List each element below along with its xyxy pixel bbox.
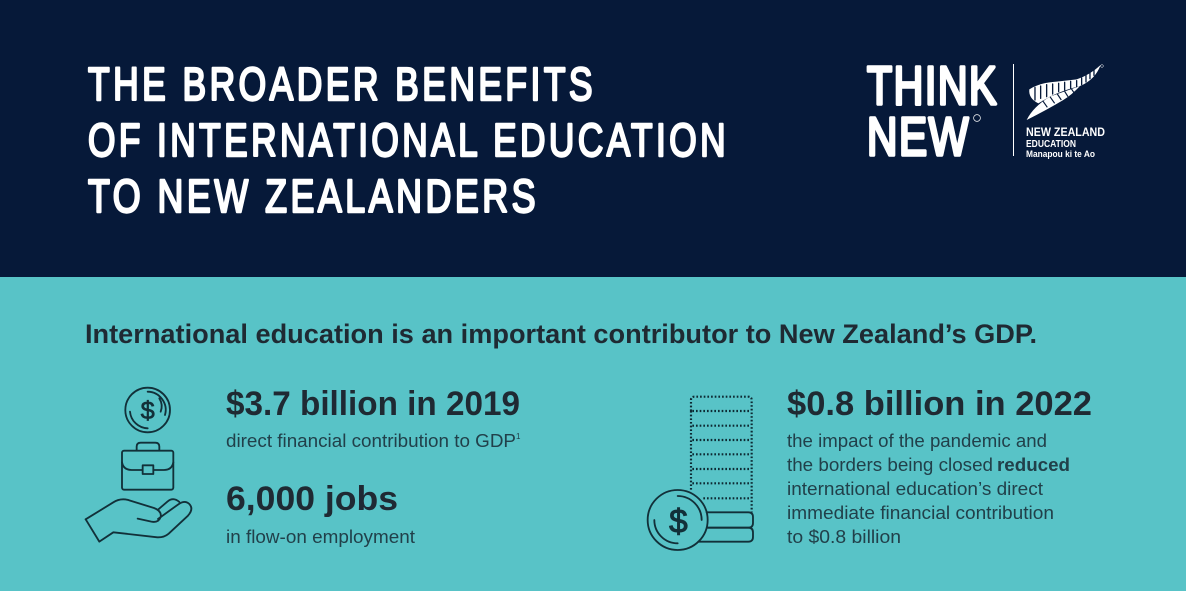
dollar sign in large coin: $ — [669, 503, 688, 540]
logo: Think New: NEW — [867, 107, 970, 167]
logo: New Zealand Education wordmark — [1026, 127, 1105, 160]
section heading: International education is an important contributor to New Zealand’s GDP. — [85, 319, 1037, 349]
icon: coin, briefcase and open hand — [86, 388, 191, 542]
stat: $3.7 billion: 1 — [516, 432, 521, 441]
title — [88, 58, 729, 222]
logo: Think New: THINK — [867, 56, 998, 116]
teal content panel — [0, 277, 1186, 591]
logo: New Zealand Education wordmark: NEW ZEALAND — [1026, 127, 1105, 139]
description of pandemic impact — [787, 431, 1070, 547]
stat: 6,000 jobs: in flow-on employment — [226, 527, 415, 547]
title: OF INTERNATIONAL EDUCATION — [88, 114, 729, 166]
description of pandemic impact: international education’s direct — [787, 479, 1043, 499]
logo: New Zealand Education wordmark: Manapou ki te Ao — [1026, 149, 1095, 160]
description of pandemic impact: the impact of the pandemic and — [787, 431, 1047, 451]
title: TO NEW ZEALANDERS — [88, 170, 539, 222]
dollar sign in coin: $ — [141, 397, 155, 425]
stat: $3.7 billion: $3.7 billion in 2019 — [226, 385, 520, 423]
logo: Think New — [867, 56, 1014, 167]
stat: $0.8 billion — [787, 385, 1092, 547]
stat: $0.8 billion: $0.8 billion in 2022 — [787, 385, 1092, 423]
description of pandemic impact: the borders being closed — [787, 455, 993, 475]
stat: $3.7 billion: direct financial contribution to GDP — [226, 431, 516, 451]
title: THE BROADER BENEFITS — [88, 58, 596, 110]
logo: New Zealand Education wordmark: EDUCATION — [1026, 139, 1076, 150]
stat: 6,000 jobs — [226, 480, 415, 547]
logo: silver fern — [1027, 65, 1103, 120]
stat: $3.7 billion — [226, 385, 521, 451]
icon: dotted coin stack with large coin — [648, 397, 753, 550]
stat: 6,000 jobs: 6,000 jobs — [226, 480, 398, 518]
description of pandemic impact: immediate financial contribution — [787, 503, 1054, 523]
header band — [0, 0, 1186, 277]
description of pandemic impact: to $0.8 billion — [787, 527, 901, 547]
description of pandemic impact: reduced — [997, 455, 1070, 475]
